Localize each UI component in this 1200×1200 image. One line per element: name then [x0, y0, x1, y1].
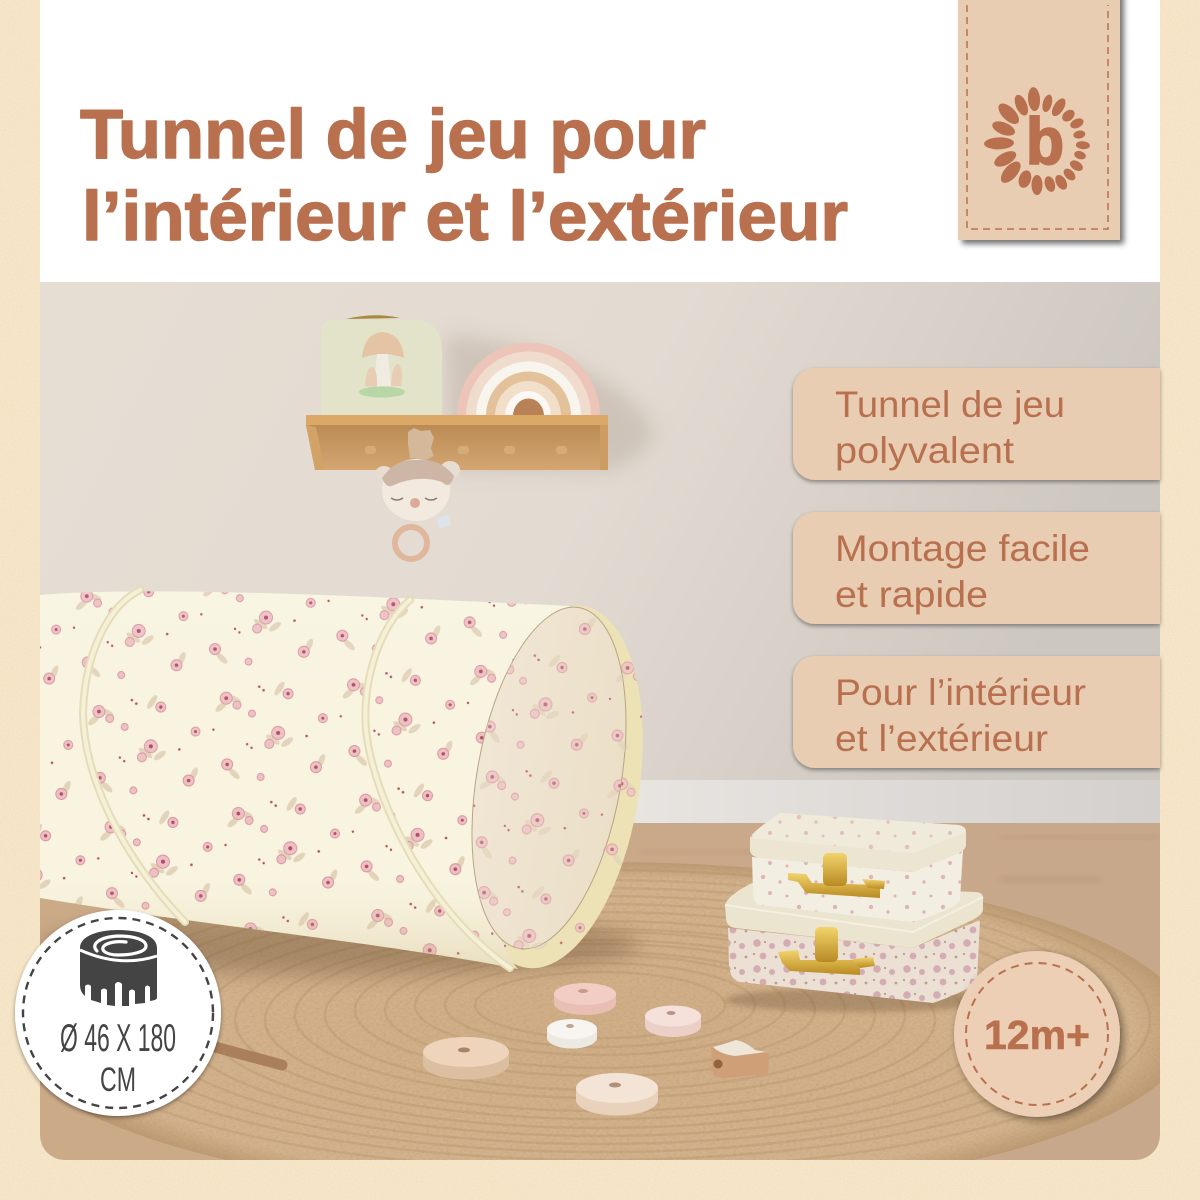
feature pill: easy setup	[793, 512, 1160, 624]
feature pill: easy setup: et rapide	[835, 574, 988, 615]
size badge	[15, 910, 221, 1116]
tunnel ring seams	[83, 590, 510, 968]
icon: tape measure roll	[80, 930, 157, 1006]
wooden toy discs	[423, 983, 769, 1116]
tunnel body	[40, 591, 570, 969]
wooden floor	[40, 823, 1160, 1160]
mushroom suitcase	[321, 315, 442, 416]
upper suitcase	[750, 813, 966, 922]
brand logo	[984, 87, 1090, 195]
wooden bird block	[711, 1040, 769, 1078]
feature pill: indoor outdoor: Pour l’intérieur	[835, 672, 1086, 713]
cream disc	[576, 1073, 658, 1116]
title: Tunnel de jeu pour	[80, 95, 706, 173]
title	[80, 95, 848, 255]
feature pill: indoor outdoor: et l’extérieur	[835, 718, 1048, 759]
brand label tag	[958, 0, 1120, 240]
feature pill: versatile: polyvalent	[835, 430, 1015, 471]
wooden peg	[200, 1043, 282, 1065]
shelf board	[306, 415, 608, 470]
tunnel outer rim	[501, 606, 643, 968]
plush deer	[375, 428, 460, 559]
light pink disc	[645, 1006, 701, 1037]
age badge	[954, 951, 1120, 1117]
pink disc	[554, 983, 616, 1015]
tunnel opening	[472, 606, 626, 950]
size badge: Ø 46 X 180	[60, 1017, 176, 1060]
play tunnel	[40, 590, 667, 981]
title: l’intérieur et l’extérieur	[82, 177, 848, 255]
brand logo: b	[1026, 104, 1064, 178]
white disc	[547, 1019, 597, 1048]
feature pill: versatile	[793, 368, 1160, 480]
feature pill: versatile: Tunnel de jeu	[835, 384, 1065, 425]
wooden shelf with toys	[306, 315, 655, 559]
wall	[40, 282, 1160, 827]
large beige disc	[423, 1037, 509, 1080]
photo: nursery scene	[10, 282, 1190, 1198]
floor shadow of tunnel	[40, 915, 640, 975]
jute rug	[40, 862, 1160, 1160]
age badge: 12m+	[984, 1012, 1090, 1058]
stacked suitcases	[725, 813, 995, 1012]
stacking rainbow	[457, 342, 600, 416]
size badge: CM	[100, 1061, 136, 1099]
feature pill: indoor outdoor	[793, 656, 1160, 768]
feature pill: easy setup: Montage facile	[835, 528, 1090, 569]
baseboard	[600, 780, 1160, 824]
lower suitcase	[725, 883, 983, 1003]
